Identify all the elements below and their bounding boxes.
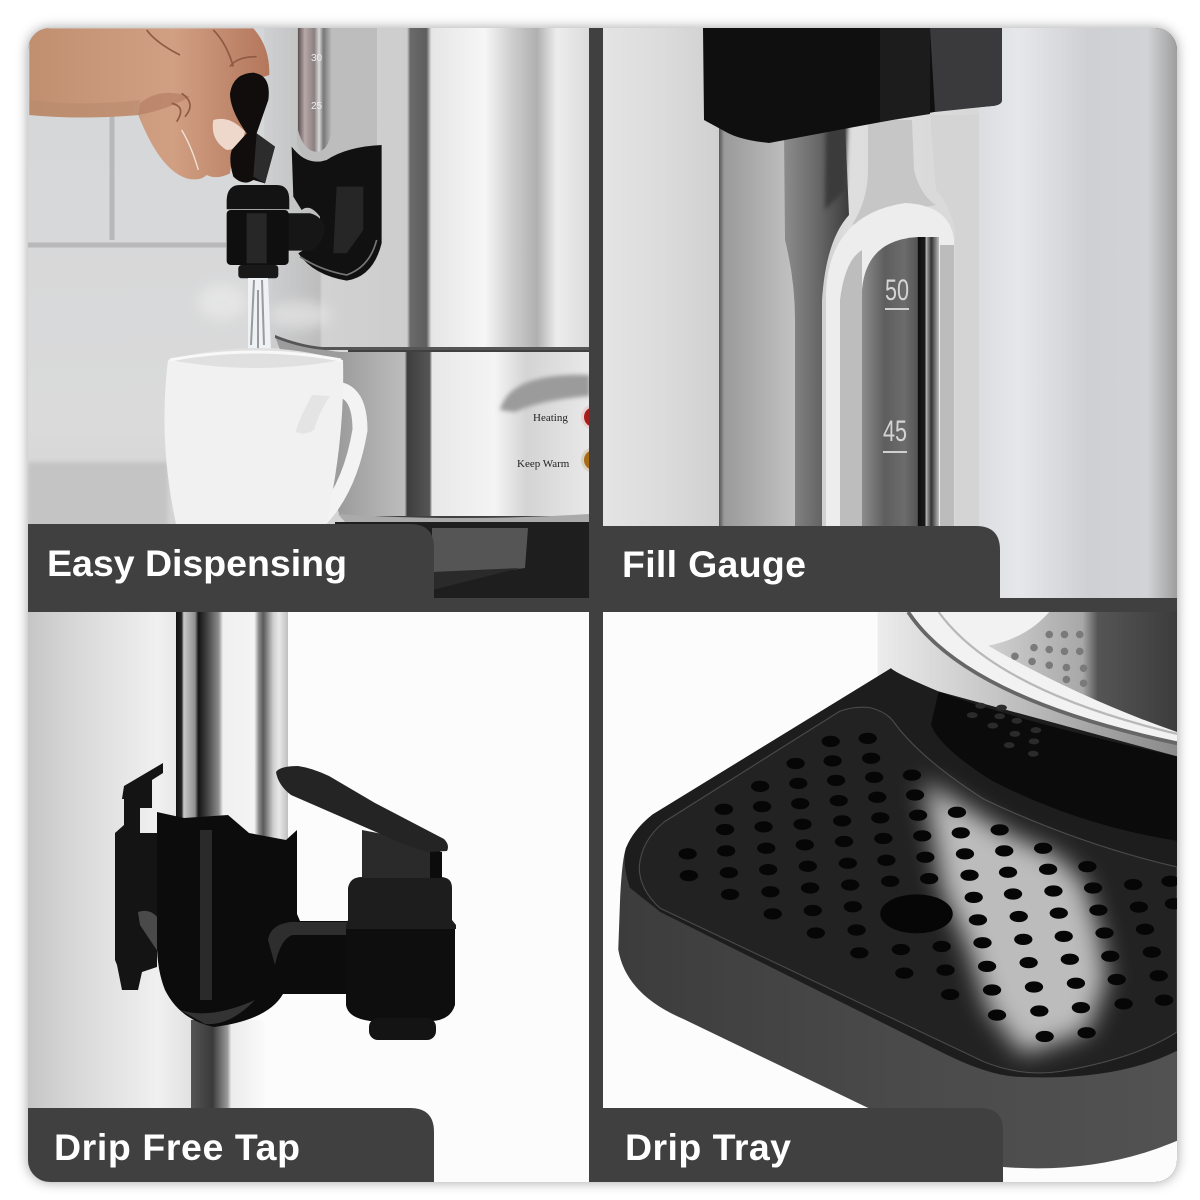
urn base: [878, 612, 1177, 758]
label: Drip Free Tap: Drip Free Tap: [54, 1126, 300, 1168]
tray gloss highlight: [923, 781, 1106, 1054]
icon: tap holder: [157, 812, 350, 1027]
gauge column: [719, 107, 979, 526]
icon: rear tap clip: [115, 763, 163, 990]
urn control labels: Heating: [533, 412, 568, 424]
urn control labels: Keep Warm: [517, 458, 570, 470]
gauge number 45: [883, 420, 907, 453]
label: Drip Free Tap: [28, 1108, 434, 1182]
icon: tap lever: [276, 766, 448, 852]
gauge number 50: 50: [885, 274, 909, 307]
panel: easy dispensing: [28, 28, 607, 598]
gauge tube on urn: 25: [311, 101, 323, 112]
tray back shelf: [931, 692, 1177, 841]
label: Fill Gauge: [603, 526, 1000, 598]
label: Fill Gauge: Fill Gauge: [622, 543, 806, 585]
steel bowl: [908, 612, 1177, 743]
label: Drip Tray: Drip Tray: [625, 1126, 791, 1168]
label: Easy Dispensing: [28, 524, 434, 598]
right urn surface: [979, 28, 1177, 598]
label: Easy Dispensing: Easy Dispensing: [47, 542, 347, 584]
label: Drip Tray: [603, 1108, 1003, 1182]
black lid: [703, 28, 1002, 143]
water stream: [248, 278, 271, 352]
tray rim: [625, 668, 1177, 1077]
panel: fill gauge: [603, 28, 1177, 598]
photo background: [603, 612, 1177, 1182]
steam: [198, 284, 332, 329]
icon: white mug: [164, 348, 360, 524]
panel: drip tray: [603, 612, 1183, 1182]
gauge window: [826, 203, 954, 526]
photo: urn body: [264, 28, 590, 598]
tray side wall: [618, 668, 1177, 1168]
tray drain holes: [679, 733, 1183, 1042]
urn control labels: [517, 405, 589, 472]
urn body: [28, 612, 193, 1108]
gauge tube on urn: 30: [311, 53, 323, 64]
icon: black tap: [227, 73, 382, 281]
gauge number 45: 45: [883, 415, 907, 448]
icon: hand: [29, 28, 269, 179]
icon: tap spout: [346, 830, 456, 1040]
panel: drip free tap: [28, 612, 589, 1182]
gauge tube on urn: [297, 28, 377, 170]
photo background: tiled wall: [28, 28, 348, 524]
chrome tube: [176, 612, 288, 1108]
left urn surface: [603, 28, 719, 526]
gauge number 50: [885, 279, 909, 310]
photo background: [28, 612, 589, 1182]
tray grid surface: [639, 707, 1177, 1073]
